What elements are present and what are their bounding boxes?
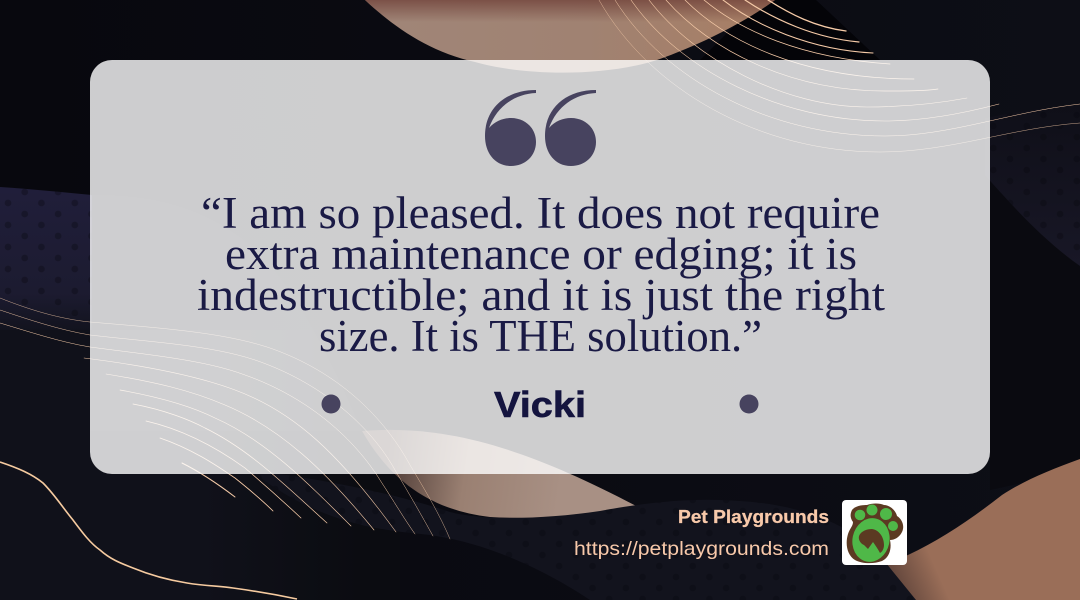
- background shape: dark diagonal wedge: [700, 0, 880, 60]
- quote text: extra maintenance or edging; it is: [225, 229, 857, 279]
- right dot: [740, 394, 758, 414]
- paw green pad: [848, 515, 894, 565]
- icon: opening quotation mark: [485, 90, 596, 166]
- line art: bottom left curve: [0, 462, 297, 599]
- paw inner brown heel: [859, 529, 884, 553]
- background shape: top tan blob: [365, 0, 775, 73]
- paw green toes: [855, 510, 865, 520]
- panel faint inner wave: [90, 195, 362, 431]
- background shape: lower left panel fill: [0, 330, 400, 600]
- background shape: upper right navy wave: [985, 104, 1080, 266]
- quote text: size. It is THE solution.”: [319, 311, 762, 361]
- icon: paw logo: [842, 500, 907, 565]
- quote text: [197, 188, 886, 361]
- author name: Vicki: [494, 384, 586, 425]
- background shape: lower right darker zone: [990, 180, 1080, 490]
- line art: upper right arcs: [599, 0, 1080, 152]
- paw brown silhouette: [847, 504, 903, 563]
- left dot: [322, 394, 340, 414]
- background shape: left navy wave: [0, 187, 92, 335]
- line art: left wave lines: [0, 298, 450, 539]
- background shape: middle tan wave: [362, 430, 642, 518]
- footer: website url: https://petplaygrounds.com: [574, 538, 829, 560]
- quote text: “I am so pleased. It does not require: [201, 188, 880, 238]
- footer: brand name: Pet Playgrounds: [678, 507, 829, 527]
- quote text: indestructible; and it is just the right: [197, 270, 886, 320]
- background shape: bottom navy wave: [250, 470, 916, 600]
- background shape: bottom right tan wave: [886, 459, 1080, 600]
- panel: testimonial card: [90, 60, 990, 474]
